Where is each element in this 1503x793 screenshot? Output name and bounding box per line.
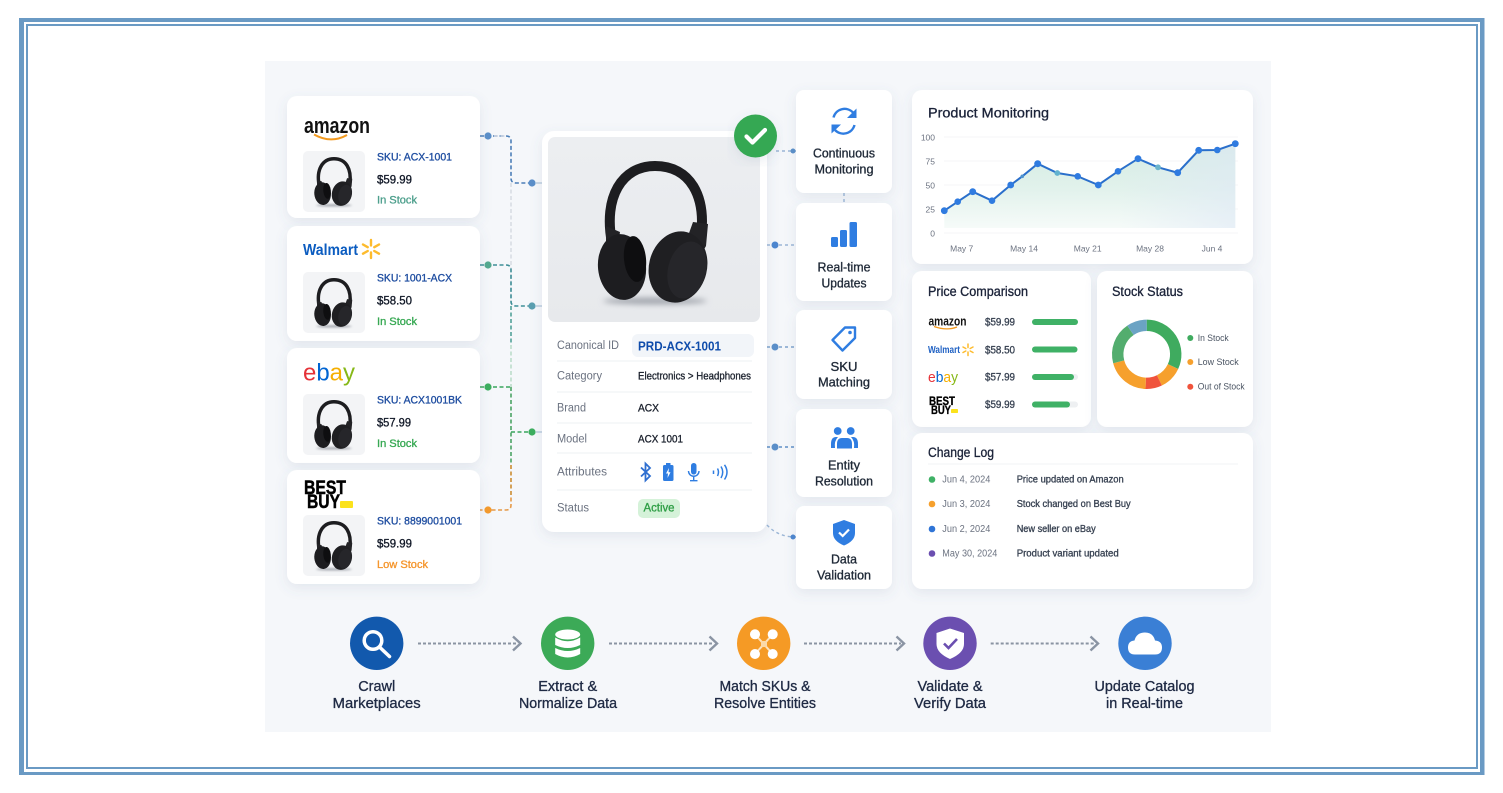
process step: Update Catalog in Real-time: [1094, 617, 1194, 712]
log entry: price update: [929, 474, 1124, 486]
logo: Best Buy: [304, 478, 353, 513]
row: model: ACX 1001: [638, 434, 683, 446]
listing details: In Stock: [377, 438, 417, 450]
x axis labels: Jun 4: [1202, 244, 1223, 254]
y axis labels: 75: [926, 156, 935, 166]
infographic panel background: [265, 61, 1271, 732]
legend: In Stock: [1198, 333, 1229, 344]
label: Resolution: [815, 474, 873, 488]
row: Best Buy price: [929, 394, 1078, 417]
x axis labels: [950, 244, 1223, 254]
logo: eBay: ebay: [303, 359, 355, 386]
heading: Stock Status: [1112, 284, 1183, 299]
label: Crawl: [358, 679, 395, 695]
icon: network: [750, 629, 778, 659]
area under line: [944, 144, 1235, 228]
label: Match SKUs &: [720, 679, 811, 695]
label: [817, 552, 871, 582]
row: attributes: Attributes: [557, 466, 607, 478]
listing details: SKU: ACX-1001: [377, 152, 452, 164]
label: Monitoring: [814, 162, 874, 176]
row: Amazon price: amazon: [928, 314, 967, 328]
row: attributes: [557, 463, 727, 481]
panel: Best Buy listing: [287, 470, 480, 584]
row: Best Buy price: BEST: [929, 394, 956, 408]
product thumbnail: [303, 272, 365, 333]
label: in Real-time: [1106, 696, 1183, 712]
x axis labels: May 21: [1074, 244, 1102, 254]
log entry: new seller: Jun 2, 2024: [942, 524, 991, 535]
log entry: variant update: [929, 548, 1119, 560]
arrow: [991, 636, 1098, 650]
icon: tag: [832, 328, 855, 350]
label: Matching: [818, 376, 870, 390]
icon: cloud: [1128, 632, 1162, 654]
process step: Crawl Marketplaces: [333, 617, 421, 712]
label: [333, 679, 421, 712]
data points: [941, 140, 1239, 214]
icon: signal bars: [831, 222, 857, 247]
icon: magnifier: [364, 632, 390, 656]
row: model: Model: [557, 434, 587, 446]
logo: Best Buy: BUY: [307, 492, 340, 513]
panel: Data Validation: [796, 506, 892, 589]
icon: shield: [936, 628, 964, 659]
logo: Best Buy: BEST: [304, 478, 346, 499]
row: status: Active: [644, 502, 674, 514]
listing details: In Stock: [377, 194, 417, 206]
y axis labels: 25: [926, 204, 935, 214]
trend line: [944, 144, 1235, 211]
label: Validate &: [918, 679, 983, 695]
listing details: $59.99: [377, 172, 412, 186]
grid lines: [944, 137, 1238, 233]
log entry: stock change: [929, 499, 1131, 510]
label: Entity: [828, 458, 861, 472]
y axis labels: 0: [930, 228, 935, 238]
row: brand: ACX: [638, 402, 660, 414]
y axis labels: 100: [921, 132, 935, 142]
log entry: variant update: Product variant updated: [1017, 548, 1119, 560]
listing details: $58.50: [377, 294, 412, 308]
row: Best Buy price: $59.99: [985, 399, 1015, 411]
area right tint: [944, 144, 1235, 228]
row: category: Electronics > Headphones: [638, 370, 751, 382]
row: Amazon price: [928, 314, 1078, 329]
row: canonical ID: Canonical ID: [557, 340, 619, 352]
product thumbnail: [303, 151, 365, 212]
label: [1094, 679, 1194, 712]
row: Best Buy price: BUY: [931, 403, 951, 417]
legend: [1187, 333, 1245, 393]
panel: Real-time Updates: [796, 203, 892, 301]
row: brand: Brand: [557, 402, 586, 414]
label: Resolve Entities: [714, 696, 816, 712]
label: Continuous: [813, 146, 875, 160]
y axis labels: [921, 132, 935, 238]
log entry: price update: Jun 4, 2024: [942, 474, 991, 486]
heading: Price Comparison: [928, 284, 1028, 299]
listing details: $59.99: [377, 536, 412, 550]
label: [818, 260, 871, 290]
icon: refresh: [832, 108, 856, 134]
x axis labels: May 28: [1136, 244, 1164, 254]
icon: wireless: [714, 465, 727, 480]
icon: verified check badge: [734, 114, 777, 158]
label: Normalize Data: [519, 696, 618, 712]
label: [914, 679, 987, 712]
row: category: Category: [557, 370, 602, 382]
process step: Extract and Normalize Data: [519, 617, 618, 712]
listing details: [377, 272, 453, 328]
panel: Amazon listing: [287, 96, 480, 218]
panel: eBay listing: [287, 348, 480, 463]
row: Amazon price: $59.99: [985, 316, 1015, 328]
icon: bluetooth: [641, 464, 650, 480]
icon: people: [831, 427, 858, 448]
row: eBay price: $57.99: [985, 372, 1015, 384]
panel: SKU Matching: [796, 310, 892, 399]
log entry: price update: Price updated on Amazon: [1017, 474, 1124, 486]
row: Walmart price: $58.50: [985, 344, 1015, 356]
connectors: canonical product to capabilities: [767, 148, 844, 540]
log entry: new seller: [929, 524, 1096, 535]
panel: canonical product card: [542, 131, 767, 532]
process step: Match SKUs and Resolve Entities: [714, 617, 816, 712]
arrow: [418, 636, 520, 650]
panel: Change Log: [912, 433, 1253, 589]
label: [813, 146, 875, 176]
icon: shield check: [833, 520, 855, 546]
label: Validation: [817, 568, 871, 582]
label: [815, 458, 873, 488]
logo: Walmart: Walmart: [303, 242, 359, 259]
log entry: stock change: Stock changed on Best Buy: [1017, 499, 1131, 510]
arrow: [804, 636, 904, 650]
row dividers: [557, 361, 752, 490]
arrow: [609, 636, 717, 650]
panel: Product Monitoring chart: [912, 90, 1253, 264]
donut chart: [1118, 325, 1176, 383]
label: Updates: [822, 276, 866, 290]
label: [714, 679, 816, 712]
product image: [548, 137, 760, 322]
panel: Continuous Monitoring: [796, 90, 892, 193]
panel: Walmart listing: [287, 226, 480, 341]
legend: Low Stock: [1198, 357, 1239, 368]
label: [519, 679, 618, 712]
label: Data: [831, 552, 857, 566]
log entry: new seller: New seller on eBay: [1017, 524, 1096, 535]
listing details: In Stock: [377, 316, 417, 328]
row: Walmart price: Walmart: [928, 345, 961, 356]
listing details: SKU: 8899001001: [377, 516, 462, 528]
y axis labels: 50: [926, 180, 935, 190]
icon: microphone: [688, 463, 699, 481]
row: canonical ID: PRD-ACX-1001: [638, 338, 721, 354]
listing details: [377, 516, 462, 571]
row: status: [557, 499, 680, 518]
panel: Entity Resolution: [796, 409, 892, 497]
x axis labels: May 14: [1010, 244, 1038, 254]
label: Update Catalog: [1094, 679, 1194, 695]
row: brand: [557, 402, 660, 414]
label: Real-time: [818, 260, 871, 274]
label: Extract &: [538, 679, 598, 695]
label: SKU: [830, 360, 858, 374]
listing details: [377, 394, 463, 450]
heading: Product Monitoring: [928, 104, 1049, 120]
listing details: SKU: ACX1001BK: [377, 394, 463, 406]
panel: Price Comparison: [912, 271, 1091, 427]
listing details: Low Stock: [377, 559, 428, 571]
row: canonical ID: [557, 334, 754, 357]
row: Walmart price: [928, 344, 1078, 356]
logo: amazon: amazon: [304, 113, 370, 138]
log entry: stock change: Jun 3, 2024: [942, 499, 991, 510]
row: status: Status: [557, 502, 589, 514]
x axis labels: May 7: [950, 244, 974, 254]
legend: Out of Stock: [1198, 382, 1245, 393]
icon: database: [555, 630, 580, 658]
product thumbnail: [303, 394, 365, 455]
icon: battery: [663, 463, 674, 481]
listing details: [377, 152, 452, 206]
heading: Change Log: [928, 445, 994, 460]
row: category: [557, 370, 751, 382]
product thumbnail: [303, 515, 365, 576]
row: model: [557, 434, 683, 446]
label: Verify Data: [914, 696, 987, 712]
process step: Validate and Verify Data: [914, 617, 987, 712]
row: eBay price: [928, 368, 1078, 386]
label: [818, 360, 870, 390]
listing details: $57.99: [377, 416, 411, 430]
connectors: marketplaces to canonical product: [480, 132, 542, 514]
log entry: variant update: May 30, 2024: [942, 548, 998, 560]
panel: Stock Status: [1097, 271, 1253, 427]
listing details: SKU: 1001-ACX: [377, 272, 453, 284]
label: Marketplaces: [333, 696, 421, 712]
row: eBay price: ebay: [928, 368, 958, 386]
